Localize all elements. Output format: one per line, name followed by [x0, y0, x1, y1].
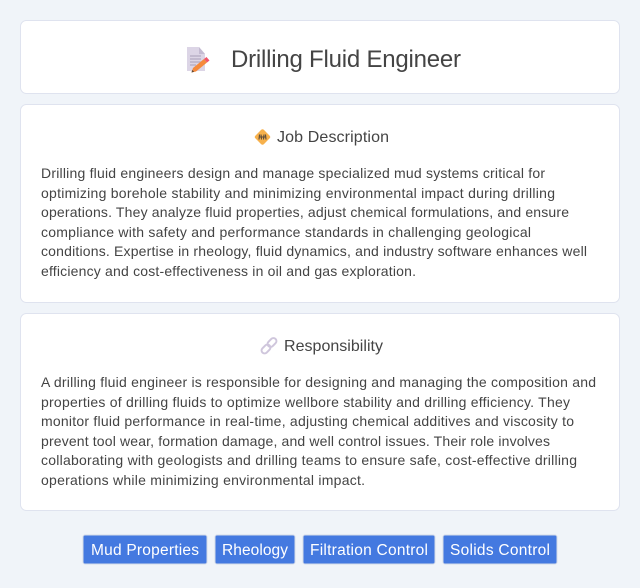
icon: link — [260, 337, 278, 355]
text block: responsibility: A drilling fluid engineer is responsible for designing and managing the composition and — [41, 374, 596, 390]
tag: mud properties: Mud Properties — [91, 542, 199, 559]
text block: responsibility: monitor fluid performance in real-time, adjusting chemical additives and viscosity to — [41, 413, 574, 429]
text block: job description: compliance with safety and performance standards in challenging geological — [41, 224, 531, 240]
text block: job description: operations. They analyze fluid properties, adjust chemical formulations, and ensure — [41, 204, 569, 220]
text block: job description: efficiency and cost-effectiveness in oil and gas exploration. — [41, 263, 416, 279]
text block: job description: conditions. Expertise in rheology, fluid dynamics, and industry software enhances well — [41, 243, 587, 259]
heading: job description: Job Description — [277, 129, 389, 146]
tag: rheology: Rheology — [222, 542, 288, 559]
icon: construction diamond — [254, 129, 271, 145]
tag: filtration control: Filtration Control — [310, 542, 428, 559]
text block: responsibility: prevent tool wear, formation damage, and well control issues. Their role involves — [41, 433, 550, 449]
title: Drilling Fluid Engineer — [231, 46, 461, 73]
text block: job description — [41, 165, 587, 279]
text block: responsibility: collaborating with geologists and drilling teams to ensure safe, cost-effective drilling — [41, 452, 577, 468]
text block: job description: Drilling fluid engineers design and manage specialized mud systems critical for — [41, 165, 545, 181]
tag: solids control: Solids Control — [450, 542, 550, 559]
panel: responsibility — [20, 314, 620, 510]
tag: filtration control — [303, 535, 435, 564]
text block: responsibility: properties of drilling fluids to optimize wellbore stability and drilling efficiency. They — [41, 394, 570, 410]
text block: responsibility: operations while minimizing environmental impact. — [41, 472, 365, 488]
tag: mud properties — [83, 535, 207, 564]
tag: rheology — [215, 535, 295, 564]
panel: job description — [20, 104, 620, 302]
icon: document with pencil — [187, 47, 210, 72]
panel: title card — [20, 20, 620, 94]
tag: solids control — [443, 535, 557, 564]
text block: responsibility — [41, 374, 596, 488]
heading: responsibility: Responsibility — [284, 338, 383, 355]
text block: job description: optimizing borehole stability and minimizing environmental impact during drilling — [41, 185, 555, 201]
